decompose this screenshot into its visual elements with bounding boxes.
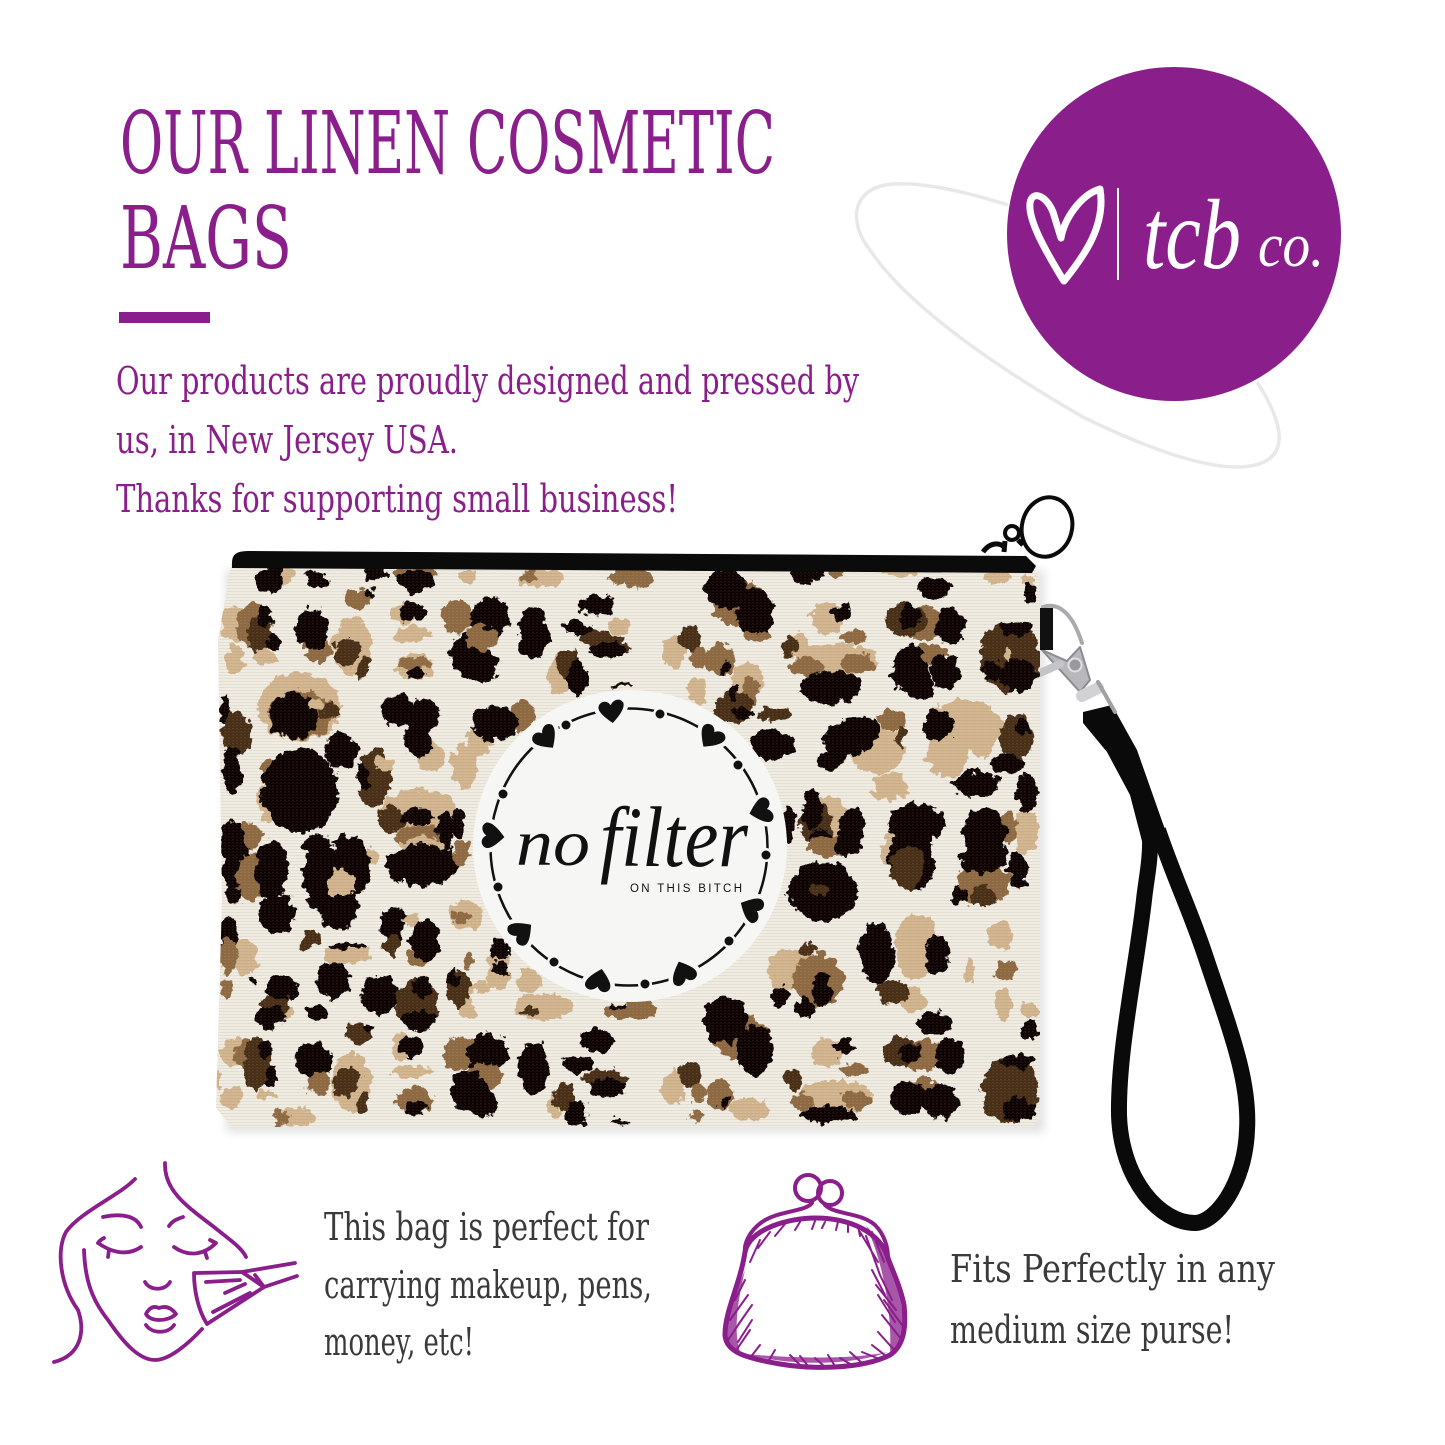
intro text block: Our products are proudly designed and pressed by xyxy=(116,359,859,403)
label text: filter xyxy=(600,789,748,885)
grey orbit ellipse xyxy=(856,184,1279,467)
logo badge xyxy=(1007,67,1341,401)
intro text block xyxy=(116,359,859,521)
cosmetic bag product xyxy=(210,492,1247,1223)
caption: bag uses: money, etc! xyxy=(324,1320,474,1364)
icon: coin purse xyxy=(725,1175,905,1367)
label text: no xyxy=(516,807,590,880)
intro text block: us, in New Jersey USA. xyxy=(116,418,458,462)
icon: heart xyxy=(1030,189,1101,281)
title xyxy=(120,94,775,289)
caption: bag uses xyxy=(324,1205,652,1364)
caption: bag uses: This bag is perfect for xyxy=(324,1205,650,1249)
strap tab xyxy=(1040,608,1053,650)
icon: face with makeup brush xyxy=(54,1163,297,1362)
logo divider xyxy=(1117,188,1119,280)
caption: purse fit xyxy=(950,1247,1275,1352)
bag body xyxy=(210,550,1050,1140)
fabric weave xyxy=(210,550,1050,1140)
caption: purse fit: medium size purse! xyxy=(950,1308,1234,1352)
metal clasp xyxy=(1040,606,1115,712)
label text: ON THIS BITCH xyxy=(630,883,742,895)
intro text block: Thanks for supporting small business! xyxy=(116,477,678,521)
ring dots xyxy=(494,710,770,988)
bag shadow xyxy=(226,570,1044,1132)
title: OUR LINEN COSMETIC xyxy=(120,94,775,194)
logo wordmark xyxy=(1143,179,1324,290)
label text xyxy=(516,789,748,895)
zipper xyxy=(232,551,1036,573)
printed circle label xyxy=(473,690,787,1002)
title: BAGS xyxy=(120,189,292,289)
bag strap xyxy=(1083,705,1247,1223)
leopard print xyxy=(215,563,1040,1127)
caption: purse fit: Fits Perfectly in any xyxy=(950,1247,1275,1291)
title underline xyxy=(119,312,210,323)
ring hearts xyxy=(481,699,775,994)
ring line xyxy=(490,708,768,986)
caption: bag uses: carrying makeup, pens, xyxy=(324,1263,652,1307)
zipper ring xyxy=(983,492,1079,562)
logo wordmark: tcb xyxy=(1143,179,1241,290)
logo wordmark: co. xyxy=(1258,212,1324,280)
purse shading xyxy=(727,1226,903,1363)
